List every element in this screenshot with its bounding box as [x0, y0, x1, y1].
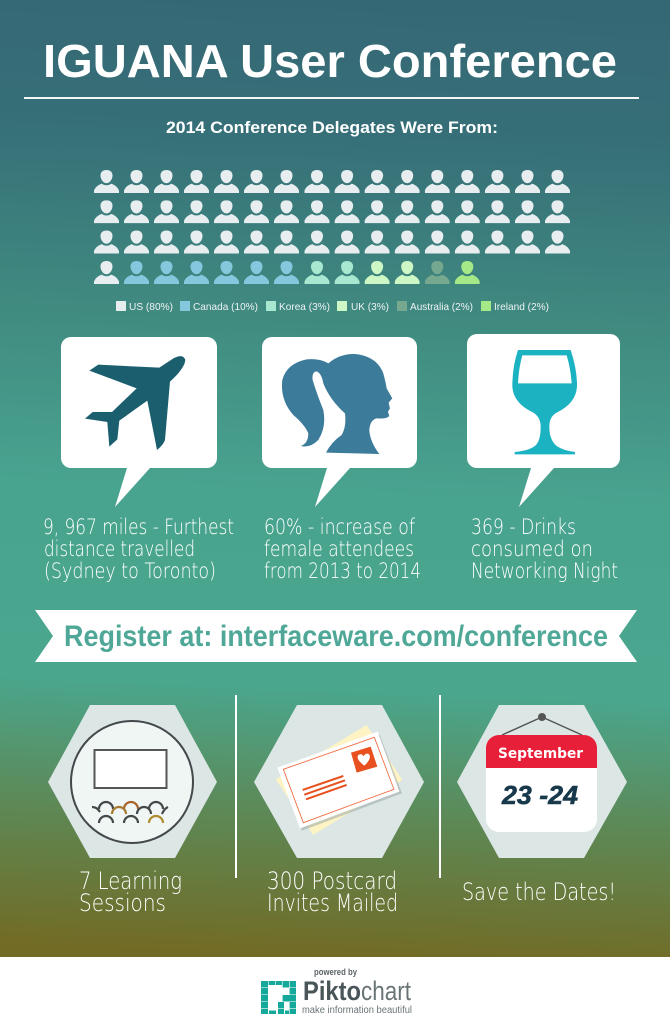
banner: register [35, 610, 637, 662]
caption: postcards: 300 Postcard [267, 867, 397, 895]
footer: Piktochart [0, 957, 670, 1024]
hexagon: calendar [457, 705, 627, 858]
footer: Piktochart: make information beautiful [302, 1005, 412, 1016]
legend: Canada (10%) [193, 301, 258, 313]
legend [116, 301, 549, 313]
icon: presentation screen [94, 750, 166, 788]
stat text: female attendees: from 2013 to 2014 [264, 559, 421, 583]
legend: Ireland (2%) [494, 301, 549, 313]
stat text: drinks: 369 - Drinks [471, 515, 576, 539]
speech bubble: wine glass [467, 334, 620, 507]
stat text: drinks: Networking Night [471, 559, 618, 583]
footer: Piktochart: Pikto [303, 976, 361, 1006]
legend: US (80%) [129, 301, 173, 313]
caption: save the dates: Save the Dates! [462, 878, 616, 906]
legend: Australia (2%) [410, 301, 473, 313]
stat text: female attendees [264, 515, 421, 583]
subheading: delegates: 2014 Conference Delegates Were From: [166, 118, 498, 137]
icon: woman silhouette [282, 354, 392, 454]
icon: audience [92, 802, 168, 823]
legend: UK (3%) [351, 301, 389, 313]
banner: register: Register at: interfaceware.com/conference [64, 620, 608, 653]
icon: postcards [276, 725, 402, 835]
icon: Piktochart logo [261, 981, 296, 1014]
legend: Korea (3%) [279, 301, 330, 313]
stat text: female attendees: female attendees [264, 537, 414, 561]
caption: postcards: Invites Mailed [267, 889, 398, 917]
icon: plane [85, 356, 185, 450]
caption: learning sessions: Sessions [79, 889, 166, 917]
stat text: drinks [471, 515, 618, 583]
speech bubble: woman [262, 337, 417, 507]
title: IGUANA User Conference [43, 35, 617, 87]
icon: wine glass [512, 350, 577, 454]
hexagon: learning sessions [48, 705, 217, 858]
caption: postcards [267, 867, 398, 917]
stat text: distance [43, 515, 234, 583]
pictogram chart: delegates by country [94, 170, 570, 284]
speech bubble: plane [61, 337, 217, 507]
caption: learning sessions: 7 Learning [79, 867, 182, 895]
stat text: distance: (Sydney to Toronto) [44, 559, 216, 583]
icon: calendar hanger [502, 717, 582, 735]
stat text: drinks: consumed on [471, 537, 593, 561]
icon: calendar [486, 735, 597, 832]
footer: Piktochart: chart [361, 976, 411, 1006]
icon: calendar: 23 -24 [501, 780, 579, 810]
hexagon: postcards [254, 705, 424, 858]
icon: calendar: September [498, 746, 583, 762]
stat text: female attendees: 60% - increase of [264, 515, 415, 539]
footer: Piktochart: powered by [314, 967, 358, 978]
stat text: distance: distance travelled [44, 537, 195, 561]
stat text: distance: 9, 967 miles - Furthest [43, 515, 234, 539]
caption: learning sessions [79, 867, 182, 917]
